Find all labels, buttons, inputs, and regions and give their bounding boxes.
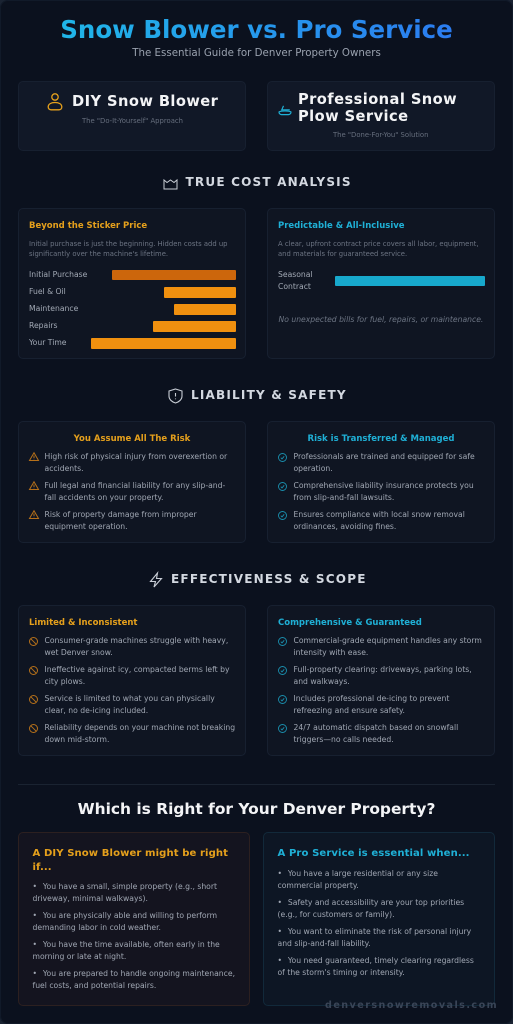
list item: • xyxy=(278,956,282,964)
panel heading: Predictable & All-Inclusive xyxy=(278,221,405,231)
icon: warning xyxy=(28,510,40,519)
list item: commercial property. xyxy=(278,880,359,890)
list item: You have the time available, often early in the xyxy=(43,940,220,949)
item text xyxy=(294,693,449,717)
icon: check xyxy=(278,695,287,704)
list item: You are prepared to handle ongoing maintenance, xyxy=(43,969,235,978)
bar: initial purchase xyxy=(112,270,236,280)
panel: comprehensive and guaranteed xyxy=(267,605,495,756)
panel description xyxy=(278,240,479,258)
benefit item xyxy=(278,692,490,718)
item text: Ineffective against icy, compacted berms left by xyxy=(44,665,230,674)
panel heading: Limited & Inconsistent xyxy=(29,618,137,628)
limitation item xyxy=(29,721,241,747)
list item xyxy=(278,954,474,978)
item text xyxy=(44,636,228,657)
section title text: TRUE COST ANALYSIS xyxy=(186,175,352,189)
item text: Reliability depends on your machine not breaking xyxy=(44,723,235,732)
item text: wet Denver snow. xyxy=(44,648,113,657)
list item: • xyxy=(278,926,282,936)
item text: ordinances, avoiding fines. xyxy=(294,522,396,531)
item text xyxy=(44,722,235,746)
icon: check xyxy=(278,482,287,491)
icon: plow xyxy=(278,106,292,116)
bar label: Initial Purchase xyxy=(29,270,87,279)
item text xyxy=(294,452,475,473)
bar label: Repairs xyxy=(29,321,58,330)
benefit item xyxy=(278,721,490,747)
risk item xyxy=(28,510,197,531)
panel description: and materials for guaranteed service. xyxy=(278,250,407,258)
panel description: significantly over the machine's lifetime. xyxy=(29,250,168,258)
item text: Service is limited to what you can physically xyxy=(44,694,215,703)
item text xyxy=(294,510,465,531)
item text xyxy=(44,452,228,473)
item text: intensity with ease. xyxy=(294,648,368,657)
item text xyxy=(294,722,458,746)
limitation item xyxy=(29,694,215,715)
icon: ban xyxy=(29,695,38,704)
item text: equipment operation. xyxy=(44,522,128,531)
panel heading: Risk is Transferred & Managed xyxy=(308,434,454,444)
item text: refreezing and ensure safety. xyxy=(294,706,405,715)
panel heading: if... xyxy=(32,862,52,873)
icon: ban xyxy=(29,637,38,646)
panel heading: Beyond the Sticker Price xyxy=(29,221,147,231)
item text: Full legal and financial liability for any slip-and- xyxy=(44,481,225,490)
bar: repairs xyxy=(152,321,236,332)
list item xyxy=(278,896,464,920)
item text xyxy=(294,481,474,502)
icon: check xyxy=(278,453,287,462)
benefit item xyxy=(278,452,475,473)
panel: beyond the sticker price xyxy=(18,208,246,359)
icon: person xyxy=(48,93,62,110)
item text: city plows. xyxy=(44,677,85,686)
panel: limited and inconsistent xyxy=(18,605,246,756)
list item: Safety and accessibility are your top priorities xyxy=(288,898,464,906)
bar: fuel and oil xyxy=(164,287,236,298)
risk item xyxy=(28,480,225,502)
heading: Professional Snow Plow Service: Professional Snow xyxy=(298,91,457,108)
section title text: LIABILITY & SAFETY xyxy=(191,388,347,402)
panel heading: A DIY Snow Blower might be right xyxy=(32,848,228,859)
panel: professional service header xyxy=(267,81,495,151)
list item: You need guaranteed, timely clearing regardless xyxy=(288,956,474,964)
panel description xyxy=(29,240,228,258)
panel: you assume all the risk xyxy=(18,421,246,543)
icon: ban xyxy=(29,724,38,733)
item text xyxy=(294,635,482,659)
item text: clear, no de-icing included. xyxy=(44,706,148,715)
item text xyxy=(44,510,197,531)
section heading: effectiveness and scope xyxy=(149,571,367,588)
heading: DIY Snow Blower: DIY Snow Blower xyxy=(72,93,218,110)
icon: check xyxy=(278,511,287,520)
subtitle: The Essential Guide for Denver Property Owners xyxy=(132,47,381,59)
bar label: Fuel & Oil xyxy=(29,287,66,296)
section heading: true cost analysis xyxy=(164,175,352,190)
list item: driveway, minimal walkways). xyxy=(32,894,148,903)
item text: 24/7 automatic dispatch based on snowfall xyxy=(294,723,458,732)
item text: Comprehensive liability insurance protects you xyxy=(294,481,474,490)
list item xyxy=(32,939,220,963)
icon: check xyxy=(278,637,287,646)
list item: fuel costs, and potential repairs. xyxy=(32,981,156,990)
panel description: Initial purchase is just the beginning. Hidden costs add up xyxy=(29,240,228,248)
section title text: EFFECTIVENESS & SCOPE xyxy=(171,572,367,586)
bar label: seasonal contract: Contract xyxy=(278,282,311,291)
list item: • xyxy=(278,898,282,906)
panel: predictable and all-inclusive xyxy=(267,208,495,359)
list item: morning or late at night. xyxy=(32,952,126,961)
list item xyxy=(32,910,217,934)
list: pro conditions xyxy=(278,866,488,982)
bar label: Maintenance xyxy=(29,304,78,313)
list item xyxy=(32,881,217,905)
item text: fall accidents on your property. xyxy=(44,493,163,502)
list item: • xyxy=(32,882,37,891)
list item: of the storm's timing or intensity. xyxy=(278,968,405,976)
item text: triggers—no calls needed. xyxy=(294,735,394,744)
list item: • xyxy=(32,911,37,920)
bar label: seasonal contract: Seasonal xyxy=(278,270,313,279)
panel heading: Comprehensive & Guaranteed xyxy=(278,618,422,628)
list item: and slip-and-fall liability. xyxy=(278,938,371,948)
item text: down mid-storm. xyxy=(44,735,109,744)
heading: which is right: Which is Right for Your Denver Property? xyxy=(78,800,435,818)
item text: High risk of physical injury from overexertion or xyxy=(44,452,227,461)
icon: warning xyxy=(28,452,40,461)
list item: demanding labor in cold weather. xyxy=(32,923,161,932)
list item: You have a large residential or any size xyxy=(288,868,438,878)
icon: check xyxy=(278,724,287,733)
item text xyxy=(44,665,230,686)
item text: Full-property clearing: driveways, parking lots, xyxy=(294,665,472,674)
section heading: liability and safety xyxy=(168,388,347,404)
benefit item xyxy=(278,510,465,531)
item text: Ensures compliance with local snow removal xyxy=(294,510,465,519)
panel heading xyxy=(32,847,228,875)
item text: and walkways. xyxy=(294,677,350,686)
icon: lightning bolt xyxy=(149,571,163,588)
icon: check xyxy=(278,666,287,675)
panel: risk is transferred and managed xyxy=(267,421,495,543)
risk item xyxy=(28,452,228,473)
panel description: A clear, upfront contract price covers all labor, equipment, xyxy=(278,240,479,248)
item text: from slip-and-fall lawsuits. xyxy=(294,493,394,502)
list item: You are physically able and willing to perform xyxy=(43,911,217,920)
note: No unexpected bills for fuel, repairs, or maintenance. xyxy=(278,315,483,324)
bar label: seasonal contract xyxy=(278,270,313,291)
tagline: The "Done-For-You" Solution xyxy=(333,131,428,139)
icon: shield xyxy=(168,388,183,404)
item text xyxy=(44,481,225,502)
icon: warning xyxy=(28,480,40,490)
item text: operation. xyxy=(294,464,333,473)
list item: • xyxy=(278,868,282,878)
item text xyxy=(294,664,472,688)
heading: Professional Snow Plow Service xyxy=(298,91,457,125)
list item: • xyxy=(32,940,37,949)
list item xyxy=(32,968,235,992)
panel: pro recommendation xyxy=(263,832,495,1006)
title: Snow Blower vs. Pro Service xyxy=(60,15,453,44)
bar label: Your Time xyxy=(29,338,67,347)
watermark: denversnowremovals.com xyxy=(325,1000,498,1011)
item text xyxy=(44,693,215,717)
bar: your time xyxy=(90,338,236,348)
limitation item xyxy=(29,636,228,657)
panel heading: A Pro Service is essential when... xyxy=(278,848,470,859)
list item: (e.g., for customers or family). xyxy=(278,910,395,918)
panel heading: You Assume All The Risk xyxy=(74,434,190,444)
list item: You want to eliminate the risk of personal injury xyxy=(288,926,471,936)
item text: accidents. xyxy=(44,464,84,473)
list item: You have a small, simple property (e.g., short xyxy=(43,882,217,891)
list: DIY conditions xyxy=(32,880,242,996)
benefit item xyxy=(278,663,490,689)
icon: cost box xyxy=(164,179,178,190)
tagline: The "Do-It-Yourself" Approach xyxy=(82,117,183,125)
item text: Professionals are trained and equipped for safe xyxy=(294,452,475,461)
icon: ban xyxy=(29,666,38,675)
item text: Risk of property damage from improper xyxy=(44,510,197,519)
limitation item xyxy=(29,665,230,686)
bar chart: DIY costs xyxy=(29,270,236,349)
bar: seasonal contract xyxy=(335,276,484,286)
heading: Professional Snow Plow Service: Plow Service xyxy=(298,108,408,125)
item text: Consumer-grade machines struggle with heavy, xyxy=(44,636,228,645)
benefit item xyxy=(278,634,490,660)
bar: maintenance xyxy=(174,304,236,314)
list item: • xyxy=(32,969,37,978)
item text: Commercial-grade equipment handles any storm xyxy=(294,636,482,645)
list item xyxy=(278,868,438,892)
panel: DIY recommendation xyxy=(18,832,250,1006)
benefit item xyxy=(278,481,474,502)
list item xyxy=(278,926,471,950)
panel: DIY snow blower header xyxy=(18,81,246,151)
item text: Includes professional de-icing to prevent xyxy=(294,694,449,703)
